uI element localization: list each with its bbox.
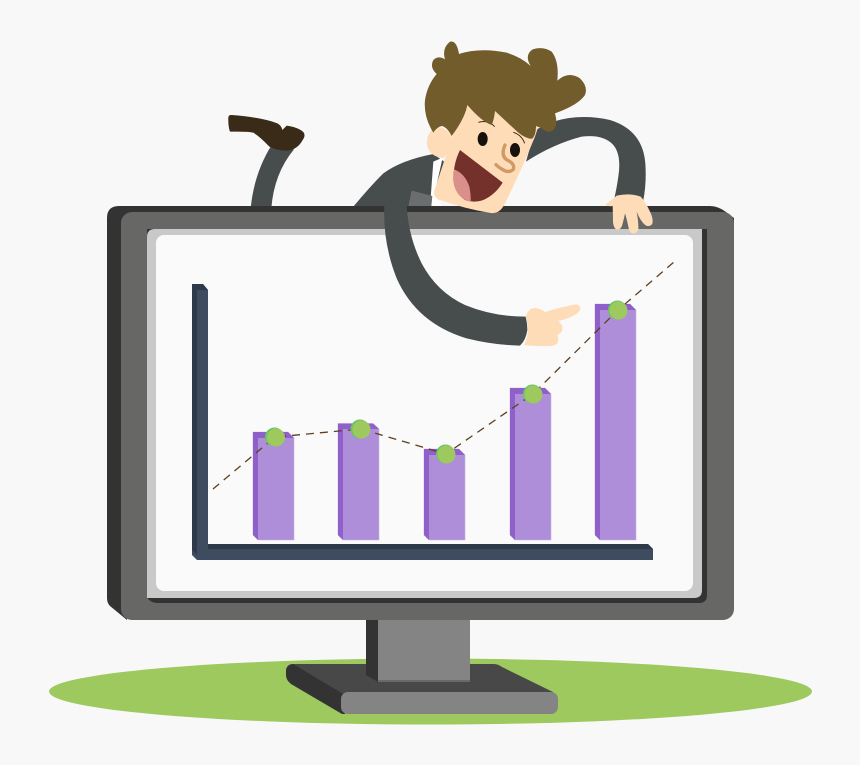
bar 2: [338, 424, 379, 540]
monitor: [107, 206, 734, 620]
character: torso and far arm behind monitor: [353, 117, 646, 208]
bar chart: [192, 262, 674, 560]
character: front arm, hands and head: [384, 41, 653, 346]
bar 4: [510, 388, 551, 540]
bar 5: [595, 304, 636, 540]
chart axes: [192, 284, 653, 560]
hair: [425, 41, 586, 139]
face: [434, 102, 538, 213]
dashed trend line: [213, 262, 674, 489]
bar 3: [424, 449, 465, 540]
nose: [496, 145, 514, 172]
mouth: [453, 150, 503, 202]
gripping hand: [605, 194, 653, 234]
pointing hand: [524, 304, 580, 346]
eyes: [478, 132, 520, 157]
ground ellipse: [49, 658, 812, 724]
monitor stand and base: [286, 620, 558, 714]
ear: [427, 127, 453, 158]
data point markers: [265, 300, 628, 464]
bar 1: [253, 432, 294, 540]
character: leg and shoe behind monitor: [228, 115, 305, 208]
eyebrows: [478, 121, 525, 143]
tongue: [453, 169, 471, 202]
pointing arm: [384, 205, 527, 346]
